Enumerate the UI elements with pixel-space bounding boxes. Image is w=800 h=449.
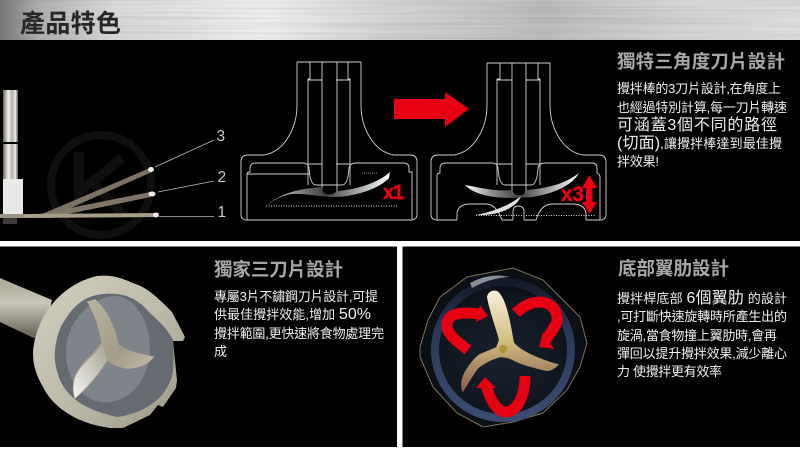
base blue ring <box>435 282 571 418</box>
arrow: bottom <box>476 376 525 412</box>
heading: three-blade design: 獨家三刀片設計 <box>214 259 343 280</box>
angle labels: 2 <box>218 169 226 186</box>
diagram: cup with one cutting path <box>241 62 417 220</box>
text block: three-angle blade: 拌效果! <box>617 154 659 169</box>
text block: three-blade design: 成 <box>214 344 227 359</box>
rotation arrows <box>447 302 557 412</box>
label: x3: x3 <box>561 183 584 206</box>
outer ring <box>33 276 185 428</box>
title: 產品特色 <box>20 10 121 38</box>
blades: three levels <box>465 173 579 198</box>
photo: base with ribs and blade <box>420 268 587 427</box>
text block: three-angle blade: (切面),讓攪拌棒達到最佳攪 <box>617 134 782 152</box>
text block: three-angle blade <box>617 81 787 169</box>
text block: three-blade design <box>214 289 384 359</box>
text block: three-blade design: 供最佳攪拌效能,增加 50% <box>214 306 371 323</box>
base rim <box>420 268 587 427</box>
photo: blender head with three blades <box>0 276 185 428</box>
text block: bottom rib design <box>617 289 787 379</box>
panel: bottom rib design <box>420 258 787 427</box>
arrow: top left <box>447 305 488 350</box>
panel: three-blade design <box>0 259 384 428</box>
angle labels: 1 <box>218 204 226 221</box>
text block: three-angle blade: 也經過特別計算,每一刀片轉速 <box>617 100 787 115</box>
base floor highlight <box>470 275 510 288</box>
arrow: red right arrow <box>394 92 469 127</box>
angle leader lines <box>155 140 214 216</box>
arrow: top right <box>516 302 557 349</box>
angle labels <box>216 128 226 221</box>
text block: bottom rib design: ,可打斷快速旋轉時所產生出的 <box>617 309 787 324</box>
watermark: K logo <box>51 135 151 235</box>
panel: three-angle blade <box>0 51 787 235</box>
dividers: white frame <box>0 241 800 449</box>
blade: single level <box>266 172 390 206</box>
text block: three-angle blade: 可涵蓋3個不同的路徑 <box>617 116 777 134</box>
text block: three-blade design: 攪拌範圍,更快速將食物處理完 <box>214 326 384 341</box>
heading: bottom rib design: 底部翼肋設計 <box>618 258 729 279</box>
photo: blade side view <box>0 90 159 224</box>
text block: bottom rib design: 彈回以提升攪拌效果,減少離心 <box>617 346 787 361</box>
text block: bottom rib design: 攪拌桿底部 6個翼肋 的設計 <box>617 289 787 307</box>
diagram: cup with three cutting paths <box>431 63 606 220</box>
inner cup <box>55 294 174 417</box>
blade <box>462 292 557 390</box>
rod <box>0 278 52 342</box>
text block: three-blade design: 專屬3片不鏽鋼刀片設計,可提 <box>214 289 378 304</box>
heading: three-angle blade: 獨特三角度刀片設計 <box>617 51 785 72</box>
angle labels: 3 <box>216 128 225 145</box>
label: x1: x1 <box>383 182 404 204</box>
text block: three-angle blade: 攪拌棒的3刀片設計,在角度上 <box>617 81 781 96</box>
header bar: brushed metal <box>0 0 800 40</box>
blade <box>74 300 153 398</box>
inner disc <box>66 296 150 402</box>
text block: bottom rib design: 旋渦,當食物撞上翼肋時,會再 <box>617 328 777 343</box>
arrow: red double arrow <box>582 175 597 214</box>
text block: bottom rib design: 力 使攪拌更有效率 <box>617 364 722 379</box>
